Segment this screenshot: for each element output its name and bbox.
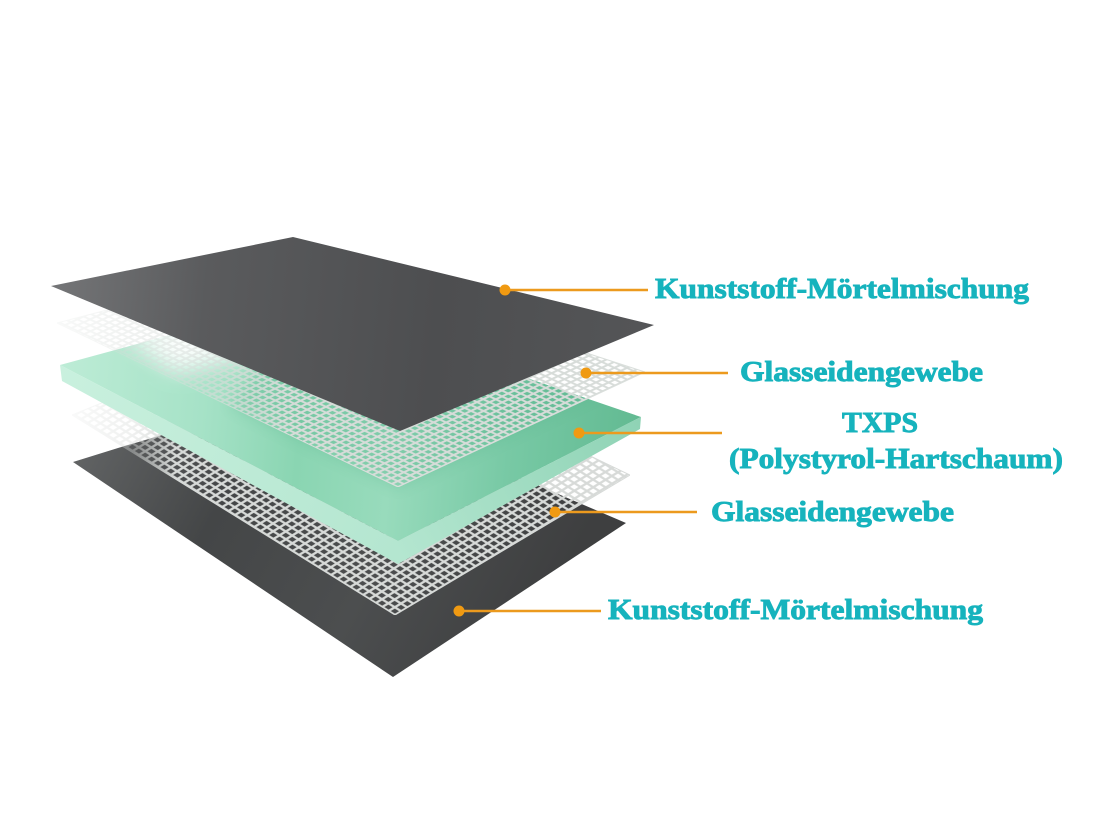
callout: lower mesh (550, 496, 954, 528)
label: Glasseidengewebe (740, 356, 983, 388)
leader line and dot (574, 428, 722, 438)
leader line and dot (500, 284, 648, 296)
callout: bottom mortar layer (454, 594, 984, 626)
leader line and dot (454, 606, 601, 616)
layer: top mortar sheet (51, 237, 654, 431)
callout: top mortar layer (500, 273, 1030, 305)
label (729, 407, 1063, 475)
layer: lower glass fibre mesh (86, 403, 630, 615)
leader line and dot (580, 368, 728, 378)
layer: bottom mortar sheet (73, 390, 626, 677)
label: Glasseidengewebe (711, 496, 954, 528)
layered material diagram (51, 237, 1062, 677)
label: Kunststoff-Mörtelmischung (655, 273, 1030, 305)
layer: upper glass fibre mesh (68, 310, 645, 487)
label: Kunststoff-Mörtelmischung (608, 594, 984, 626)
leader line and dot (550, 506, 697, 518)
layer: TXPS foam board (60, 335, 641, 564)
callout: upper mesh (580, 356, 983, 388)
label: TXPS (842, 407, 918, 439)
label: (Polystyrol-Hartschaum) (729, 443, 1063, 475)
callout: foam core (574, 407, 1063, 475)
